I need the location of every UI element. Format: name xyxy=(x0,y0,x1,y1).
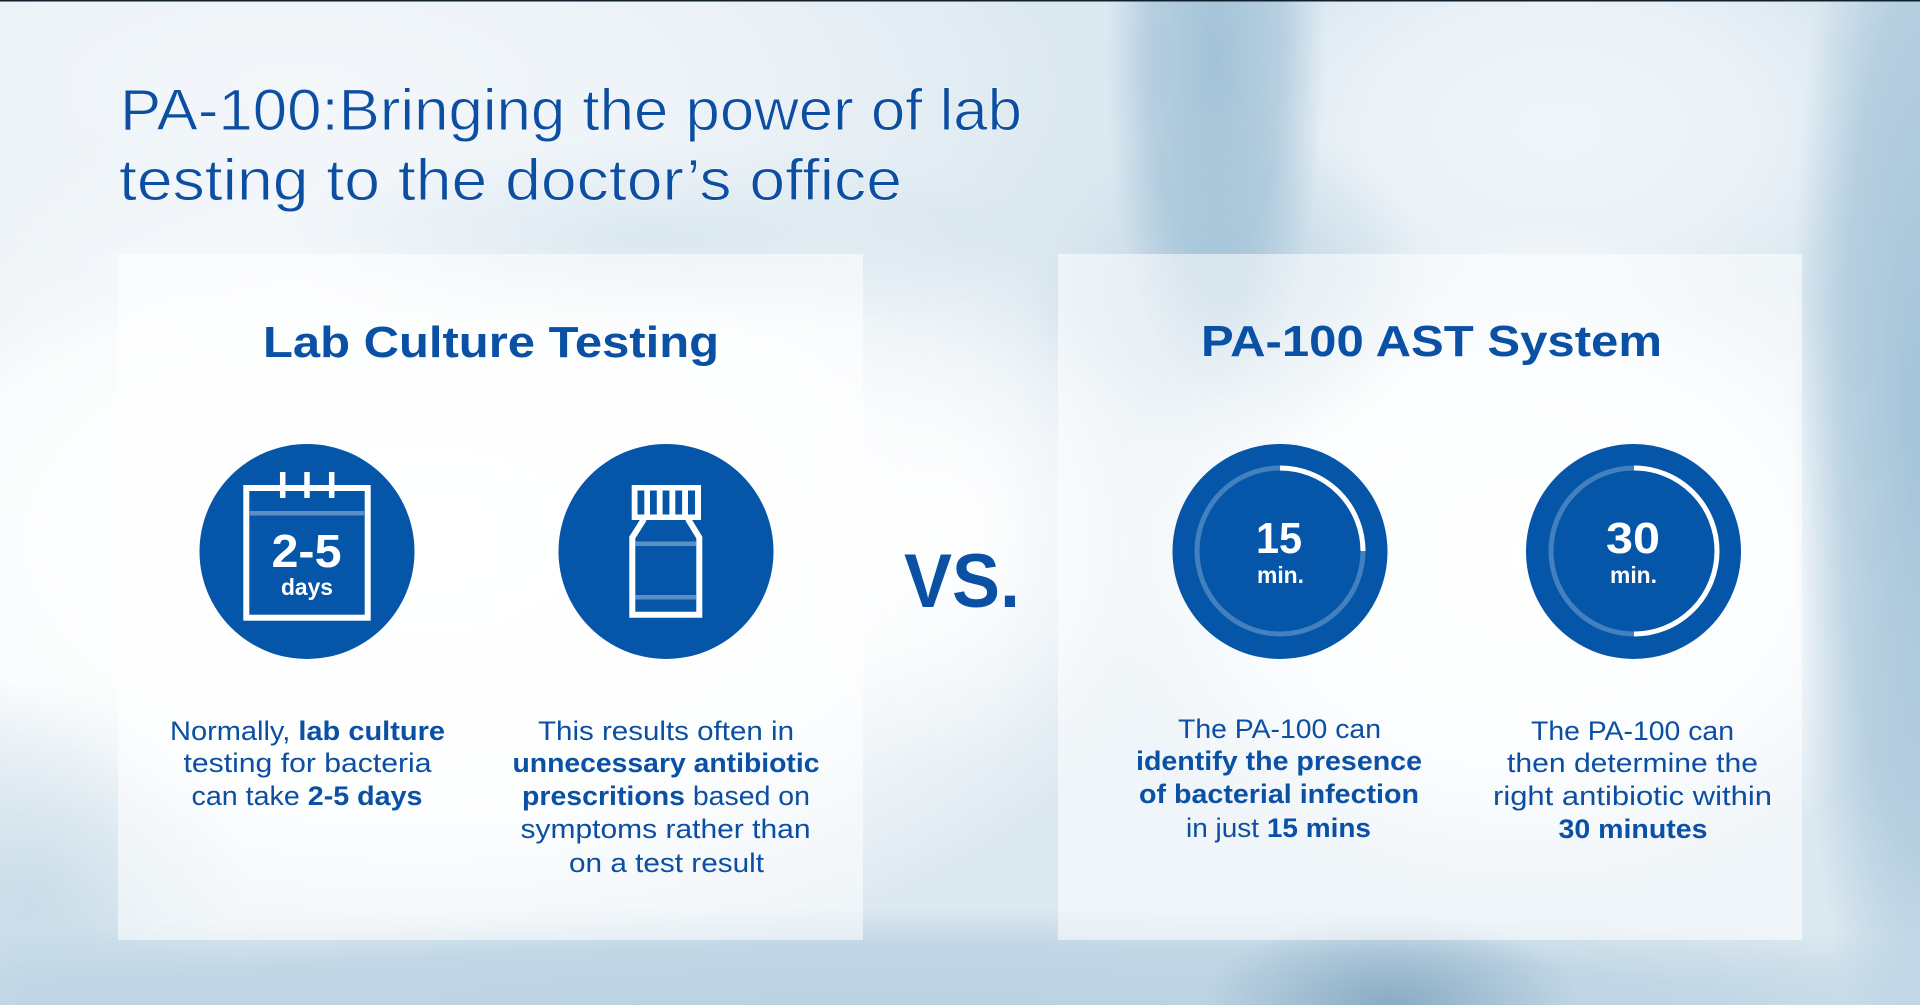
title: PA-100:Bringing the power of lab xyxy=(120,78,1022,143)
icon: 15 minute timer xyxy=(1172,444,1388,659)
text: unnecessary prescriptions: prescritions based on xyxy=(522,781,810,811)
text: identify infection: identify the presence xyxy=(1136,746,1422,776)
text: determine antibiotic: right antibiotic within xyxy=(1493,781,1772,811)
heading: PA-100 AST system: PA-100 AST System xyxy=(1201,317,1662,366)
text: unnecessary prescriptions: symptoms rather than xyxy=(520,814,810,844)
text: unnecessary prescriptions: This results often in xyxy=(538,716,794,746)
panel: PA-100 AST system xyxy=(1058,254,1802,940)
panel: lab culture testing xyxy=(118,254,863,940)
text: determine antibiotic xyxy=(1493,716,1772,844)
text: identify infection xyxy=(1136,714,1422,843)
text: identify infection: of bacterial infection xyxy=(1139,779,1419,809)
title: testing to the doctor’s office xyxy=(119,148,902,213)
icon: calendar 2-5 days: days xyxy=(281,574,333,600)
text: lab culture timing: can take 2-5 days xyxy=(192,781,422,811)
text: determine antibiotic: 30 minutes xyxy=(1558,814,1708,844)
heading: lab culture testing: Lab Culture Testing xyxy=(263,318,719,367)
icon: 30 minute timer: 30 xyxy=(1606,514,1660,563)
icon: 30 minute timer: min. xyxy=(1610,562,1657,588)
icon: medicine bottle xyxy=(558,444,774,659)
text: unnecessary prescriptions: on a test result xyxy=(569,848,765,878)
text: identify infection: The PA-100 can xyxy=(1178,714,1381,744)
text: lab culture timing xyxy=(170,716,445,811)
text: identify infection: in just 15 mins xyxy=(1186,813,1371,843)
text: unnecessary prescriptions xyxy=(512,716,820,878)
icon: 30 minute timer xyxy=(1526,444,1741,659)
icon: calendar 2-5 days xyxy=(200,444,414,659)
text: determine antibiotic: then determine the xyxy=(1507,748,1758,778)
text: unnecessary prescriptions: unnecessary antibiotic xyxy=(512,748,820,778)
icon: 15 minute timer: 15 xyxy=(1256,514,1302,563)
icon: 15 minute timer: min. xyxy=(1257,562,1304,588)
text: lab culture timing: Normally, lab culture xyxy=(170,716,445,746)
title xyxy=(119,78,1022,213)
text: lab culture timing: testing for bacteria xyxy=(184,748,433,778)
text: determine antibiotic: The PA-100 can xyxy=(1531,716,1734,746)
icon: calendar 2-5 days: 2-5 xyxy=(272,525,342,577)
vs label: VS. xyxy=(904,539,1020,624)
top edge line xyxy=(0,0,1920,2)
